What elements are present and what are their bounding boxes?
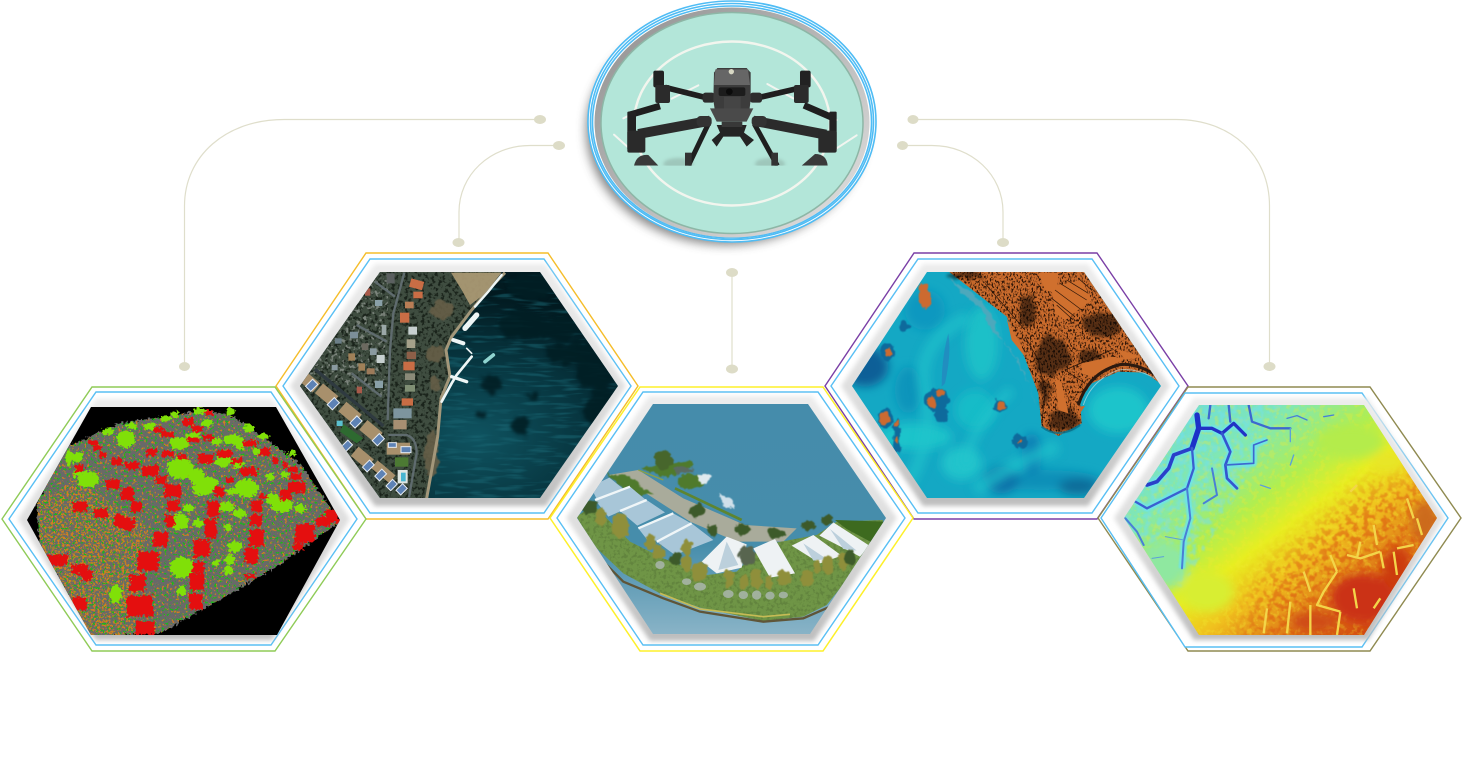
medallion shadow <box>586 15 866 245</box>
panel: hexagon 5 elevation heat map <box>1098 387 1462 658</box>
hexagon 5 outer frame <box>1098 387 1461 651</box>
image: elevation heat map <box>1124 405 1437 635</box>
connector: far right <box>908 115 1276 371</box>
hexagon 4 bevel <box>841 264 1170 506</box>
lime vegetation clusters <box>66 407 306 603</box>
hexagon 3 bevel <box>566 396 897 641</box>
connector: centre <box>726 268 738 374</box>
medallion grey bevel <box>594 8 870 238</box>
hexagon 1 inner frame <box>9 392 357 645</box>
image: bathymetry and terrain <box>852 272 1161 498</box>
panel: hexagon 4 bathymetry map <box>825 253 1188 519</box>
hexagon 1 bevel <box>18 399 350 640</box>
hexagon 2 bevel <box>290 264 626 506</box>
connector lines with end dots <box>179 115 1276 374</box>
image: classified point cloud <box>20 400 350 640</box>
landing pad ring <box>634 42 830 206</box>
medallion blue rings <box>588 1 876 242</box>
hexagon 2 outer frame <box>276 253 638 519</box>
icon: quadcopter drone <box>614 68 857 170</box>
panel: hexagon 3 3D point cloud of houses <box>550 387 913 651</box>
hexagon 4 outer frame <box>825 253 1188 519</box>
point cloud ground <box>37 410 340 637</box>
image: coastline aerial <box>295 267 625 503</box>
red tree clusters <box>47 410 339 634</box>
hexagon 3 outer frame <box>550 387 913 651</box>
panel: hexagon 2 coastline aerial <box>276 253 638 519</box>
medallion mint disc <box>601 12 863 234</box>
hexagon 3 inner frame <box>557 392 905 645</box>
panel: drone medallion <box>586 1 876 245</box>
panel: hexagon 1 classified point cloud <box>2 387 366 651</box>
hexagon 1 outer frame <box>2 387 366 651</box>
hexagon 2 inner frame <box>283 259 631 513</box>
connector: far left <box>179 115 546 371</box>
connector: inner left <box>452 141 565 247</box>
image: waterfront houses model <box>570 402 893 638</box>
connector: inner right <box>897 141 1009 247</box>
hexagon 5 bevel <box>1114 398 1444 640</box>
hexagon 5 inner frame <box>1101 393 1448 647</box>
hexagon 4 inner frame <box>831 259 1179 513</box>
